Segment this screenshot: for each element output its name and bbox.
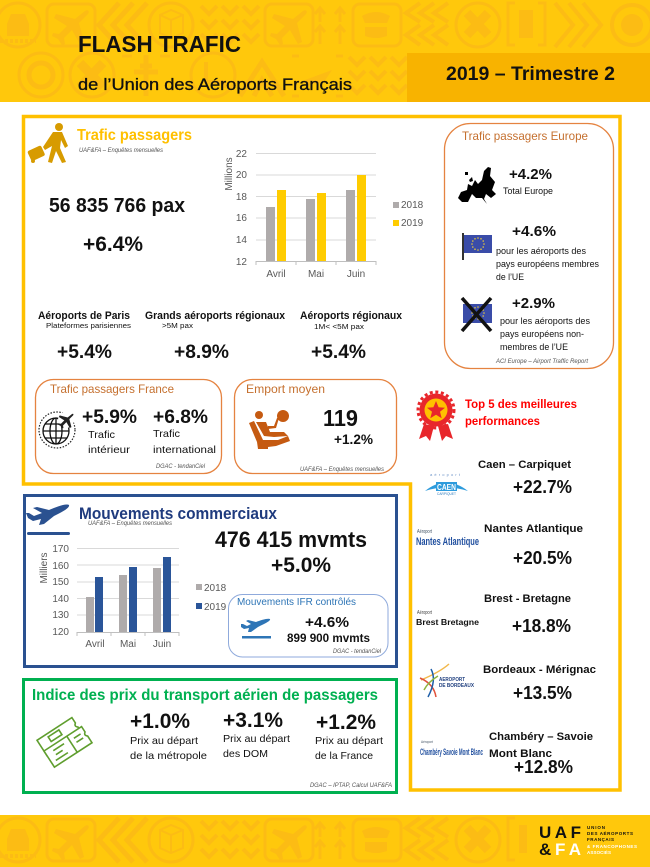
source: DGAC – IPTAP, Calcul UAF&FA [310,783,392,789]
airport: Caen: aéroport [430,472,461,477]
panel: top 5 airports [416,392,596,777]
bar chart: movements: Juin [153,639,171,650]
heading: Top 5 des meilleures [465,397,577,411]
stat: DOM: Prix au départ [223,733,290,745]
stat: grands aéroports régionaux: Grands aéroports régionaux [145,310,286,322]
total growth: +5.0% [271,554,331,577]
source: UAF&FA – Enquêtes mensuelles [300,467,384,473]
bar chart: passengers: 12 [236,257,247,268]
logo: UAF&FA: FA [555,840,581,859]
source: DGAC - tendanCiel [156,464,206,470]
bar chart: movements: 120 [52,627,69,638]
airport: Bordeaux: AEROPORT [439,677,466,683]
bar chart: passengers: Avril [266,269,286,280]
bar chart: passengers: 16 [236,213,247,224]
bar chart: movements: 150 [52,577,69,588]
icon: crossed EU flag [462,298,492,331]
stat: intérieur: intérieur [88,444,131,456]
growth: +1.2% [334,432,373,447]
panel: indice des prix [24,680,396,792]
logo: UAF&FA: & FRANCOPHONES [587,844,637,849]
panel: main yellow frame [24,116,620,790]
quarter label: 2019 – Trimestre 2 [446,64,615,85]
icon: traveller with suitcase [27,123,68,163]
airport: Chambéry: Chambéry Savoie Mont Blanc [420,747,483,757]
stat: France: de la France [315,750,373,762]
logo: UAF&FA: & [539,840,551,859]
bar chart: movements: Milliers [39,552,50,584]
panel: trafic passagers [27,123,424,363]
airport: Bordeaux: DE BORDEAUX [439,683,474,689]
stat: DOM: +3.1% [223,709,283,732]
heading: Trafic passagers Europe [462,129,588,143]
stat: EU members: pour les aéroports des [496,246,586,256]
total growth: +6.4% [83,233,143,256]
stat: métropole: +1.0% [130,710,190,733]
airport: Brest: Aéroport [417,610,432,616]
panel: mouvements commerciaux [24,496,396,666]
subtitle: de l’Union des Aéroports Français [78,75,352,94]
total passengers: 56 835 766 pax [49,195,185,217]
footer banner [0,815,650,867]
panel: emport moyen [234,380,396,474]
bar chart: movements [39,544,227,650]
stat: intérieur: +5.9% [82,406,137,428]
airport: Nantes: Aéroport [417,529,432,535]
icon: plane taking off [26,504,70,535]
stat: non-EU [500,295,590,352]
stat: aéroports régionaux: +5.4% [311,341,366,363]
stat: métropole: de la métropole [130,750,207,762]
airport: Caen: CARPIQUET [437,492,457,496]
stat: aéroports régionaux [300,310,403,363]
bar chart: passengers: 2019 [401,218,424,229]
panel: trafic passagers France [36,380,222,474]
bar chart: movements: 130 [52,610,69,621]
callout: IFR movements: 899 900 mvmts [287,633,370,645]
bar chart: passengers: 2018 [401,200,424,211]
airport: Caen: CAEN [437,483,456,492]
logo: UAF&FA: UNION [587,825,605,830]
stat: EU members [496,223,599,282]
callout: IFR movements: Mouvements IFR contrôlés [237,596,356,608]
stat: DOM [223,709,290,760]
icon: EU flag [462,233,492,260]
logo: UAF&FA: ASSOCIÉS [587,848,611,855]
stat: EU members: de l’UE [496,272,524,282]
stat: France [315,711,383,762]
airport: Chambéry [420,731,593,777]
callout: IFR movements: +4.6% [305,614,349,631]
airport: Nantes: Nantes Atlantique [416,536,479,548]
value: 119 [323,405,358,431]
stat: EU members: pays européens membres [496,259,599,269]
icon: plane [241,619,271,638]
stat: Paris: Aéroports de Paris [38,310,130,322]
stat: grands aéroports régionaux: >5M pax [162,323,194,330]
stat: EU members: +4.6% [512,223,556,240]
panel: trafic passagers Europe [444,124,614,368]
quarter box [407,53,650,102]
stat: intérieur [82,406,137,456]
bar chart: passengers: 14 [236,235,247,246]
stat: Paris [38,310,131,363]
stat: international: Trafic [153,428,180,440]
source: ACI Europe – Airport Traffic Report [495,359,588,365]
airport: Nantes [416,523,583,568]
bar chart: passengers [224,149,424,280]
stat: France: Prix au départ [315,735,383,747]
bar chart: passengers: 20 [236,170,247,181]
airport: Bordeaux: Bordeaux - Mérignac [483,664,596,676]
bar chart: passengers: 22 [236,149,247,160]
airport: Caen: +22.7% [513,477,572,497]
airport: Nantes: Nantes Atlantique [484,523,583,535]
stat: non-EU: +2.9% [512,295,555,312]
icon: Europe map [458,167,496,204]
heading: Indice des prix du transport aérien de passagers [32,687,378,704]
bar chart: movements: Mai [120,639,136,650]
logo: UAF&FA: FRANÇAIS [587,837,614,842]
logo: UAF&FA: UAF [539,823,581,842]
stat: DOM: des DOM [223,748,268,760]
stat: grands aéroports régionaux: +8.9% [174,341,229,363]
airport: Nantes: +20.5% [513,548,572,568]
airport: Caen [425,459,572,497]
title: FLASH TRAFIC [78,31,241,57]
airport: Brest: Brest Bretagne [416,617,479,627]
bar chart: movements: 2019 [204,602,227,613]
stat: international: international [153,444,216,456]
icon: seated passenger [249,410,290,449]
header banner [0,0,650,102]
panel: trafic passagers Europe: Total Europe [503,186,553,196]
bar chart: passengers: Juin [347,269,365,280]
airport: Brest: Brest - Bretagne [484,593,571,605]
heading: Mouvements commerciaux [79,505,278,523]
stat: France: +1.2% [316,711,376,734]
icon: globe with plane [39,412,75,448]
heading: Trafic passagers France [50,382,174,396]
airport: Chambéry: Mont Blanc [489,748,552,760]
stat: aéroports régionaux: 1M< <5M pax [314,324,365,331]
stat: international: +6.8% [153,406,208,428]
airport: Chambéry: +12.8% [514,757,573,777]
panel: top 5 airports: performances [465,414,540,428]
bar chart: passengers: 18 [236,192,247,203]
logo: UAF&FA: DES AÉROPORTS [587,829,633,836]
airport: Brest [416,593,571,636]
stat: métropole: Prix au départ [130,735,198,747]
airport: Chambéry: Aéroport [421,739,434,744]
bar chart: movements: 170 [52,544,69,555]
stat: aéroports régionaux: Aéroports régionaux [300,310,403,322]
stat: métropole [130,710,207,762]
source: UAF&FA – Enquêtes mensuelles [88,521,172,527]
bar chart: movements: 140 [52,594,69,605]
airport: Chambéry: Chambéry – Savoie [489,731,593,743]
bar chart: movements: 2018 [204,583,227,594]
airport: Brest: +18.8% [512,616,571,636]
source: UAF&FA – Enquêtes mensuelles [79,148,163,154]
stat: non-EU: pays européens non- [500,329,584,339]
icon: tickets [37,716,92,767]
airport: Bordeaux: +13.5% [513,683,572,703]
airport: Caen: Caen – Carpiquet [478,459,571,471]
stat: total Europe: +4.2% [509,166,552,183]
stat: non-EU: pour les aéroports des [500,316,590,326]
callout: IFR movements [228,594,388,657]
logo: UAF&FA [539,823,637,859]
stat: international [153,406,216,456]
stat: Paris: +5.4% [57,341,112,363]
heading: Emport moyen [246,382,325,396]
stat: grands aéroports régionaux [145,310,286,363]
stat: intérieur: Trafic [88,429,115,441]
total movements: 476 415 mvmts [215,527,367,552]
heading: Trafic passagers [77,127,192,144]
bar chart: movements: 160 [52,561,69,572]
airport: Bordeaux [420,664,596,703]
icon: rosette [418,392,454,441]
callout: IFR movements: DGAC - tendanCiel [333,649,382,655]
bar chart: passengers: Millions [224,157,235,191]
stat: non-EU: membres de l’UE [500,342,568,352]
bar chart: movements: Avril [85,639,105,650]
bar chart: passengers: Mai [308,269,324,280]
stat: Paris: Plateformes parisiennes [46,321,131,330]
